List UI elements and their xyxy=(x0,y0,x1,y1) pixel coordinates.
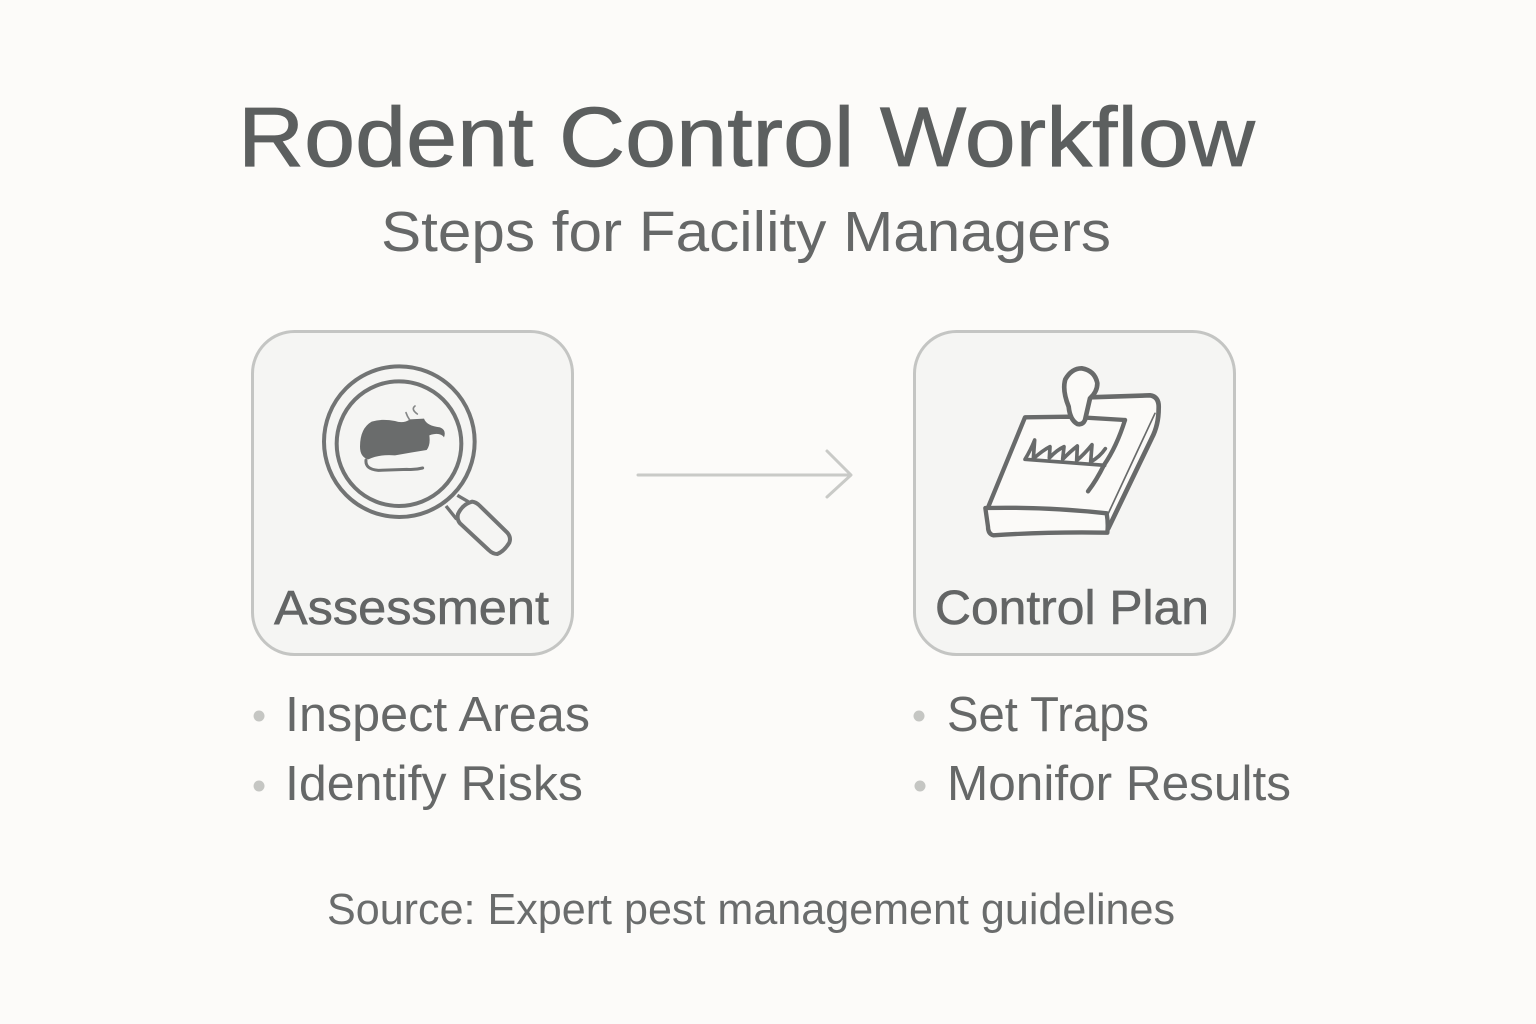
arrow: assessment to control plan xyxy=(638,451,851,497)
label: assessment: Assessment xyxy=(274,582,549,635)
bullet xyxy=(914,710,924,722)
card: assessment xyxy=(252,332,572,654)
bullet xyxy=(254,780,264,792)
subtitle: Steps for Facility Managers xyxy=(381,200,1111,264)
panel: control plan xyxy=(914,332,1234,654)
card: control plan xyxy=(914,332,1234,654)
list item: Set Traps xyxy=(947,688,1149,742)
list item: Inspect Areas xyxy=(285,688,590,742)
bullet xyxy=(914,780,926,792)
label: control plan: Control Plan xyxy=(935,582,1209,635)
panel: assessment xyxy=(252,332,572,654)
list: assessment steps xyxy=(254,688,590,811)
list item: Identify Risks xyxy=(285,757,583,811)
title: Rodent Control Workflow xyxy=(238,90,1255,184)
icon: snap trap xyxy=(985,368,1159,535)
icon: magnifying glass with rodent xyxy=(324,366,510,554)
list: control plan steps xyxy=(914,688,1291,811)
list item: Monifor Results xyxy=(947,757,1291,811)
source note: Source: Expert pest management guidelines xyxy=(327,885,1175,934)
bullet xyxy=(254,710,264,722)
